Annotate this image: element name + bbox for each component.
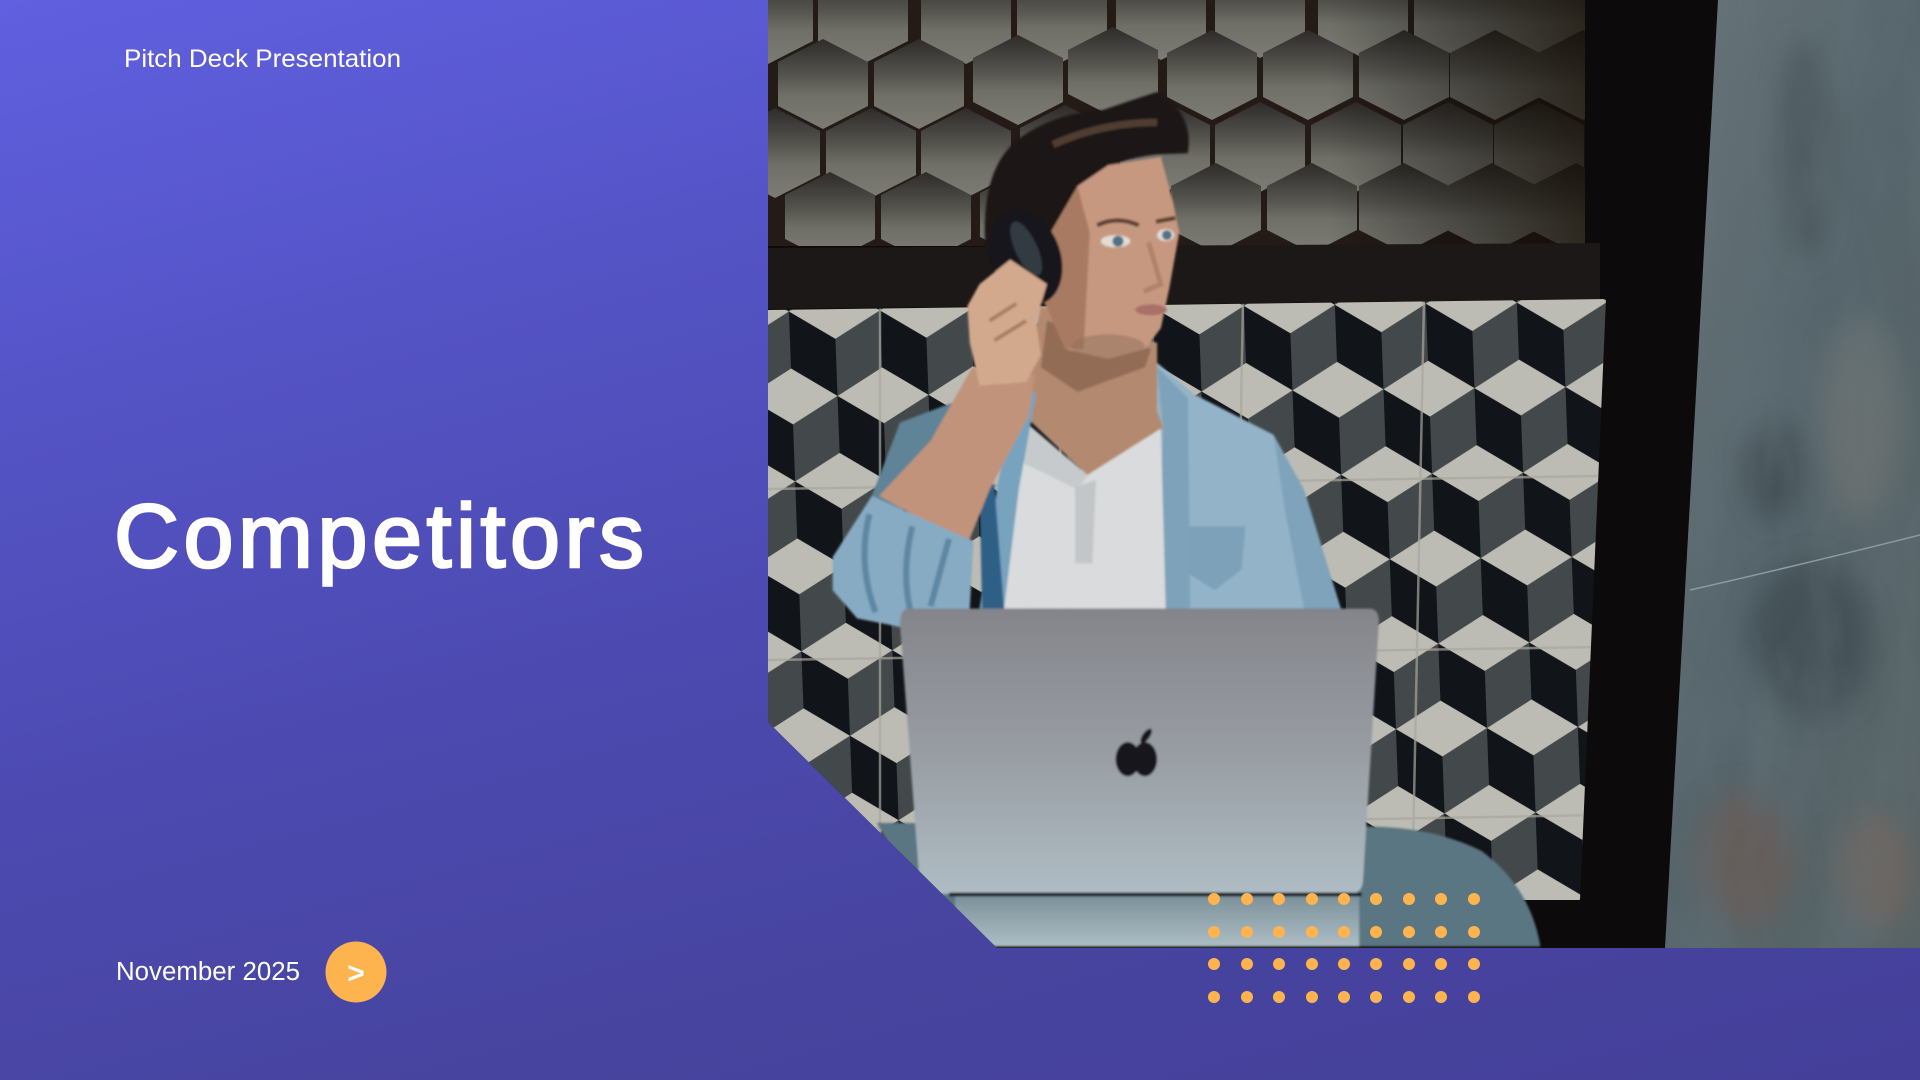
- heading: Pitch Deck Presentation: Pitch Deck Presentation: [124, 45, 401, 73]
- lips: [1135, 304, 1167, 315]
- brows: [1097, 218, 1176, 225]
- finger creases: [989, 304, 1026, 340]
- sleeve folds: [864, 514, 949, 618]
- nose: [1144, 242, 1161, 291]
- table: [877, 823, 1540, 947]
- dark wooden beam: [768, 243, 1600, 309]
- polo collar: [1024, 428, 1087, 488]
- neck shadow: [1041, 321, 1151, 392]
- headphone highlight: [1009, 220, 1043, 276]
- headphone cup: [990, 230, 1064, 304]
- man: [833, 92, 1540, 947]
- geometric cube tile wall: [768, 299, 1608, 900]
- polo placket: [1075, 480, 1096, 563]
- icon: orange arrow button: >: [347, 957, 365, 990]
- date: November 2025: November 2025: [116, 958, 300, 986]
- concrete column: [1665, 0, 1920, 948]
- blue shadow stripe: [980, 484, 1004, 609]
- face: [1067, 154, 1180, 359]
- laptop shadow: [949, 893, 1362, 896]
- hand: [967, 260, 1047, 386]
- decorative dot grid: [1208, 893, 1480, 1003]
- left denim placket: [980, 380, 1036, 609]
- icon: orange arrow button: [326, 942, 386, 1002]
- side of face shade: [1043, 186, 1090, 349]
- denim placket shade: [1157, 367, 1190, 609]
- rear shirt sleeve: [871, 402, 952, 511]
- white polo shirt: [1004, 416, 1166, 609]
- right side of denim shirt: [1156, 362, 1306, 610]
- laptop: [900, 609, 1379, 894]
- shirt pocket: [1188, 527, 1245, 590]
- hair and headband: [985, 92, 1189, 251]
- hair highlight: [1053, 122, 1157, 144]
- forearm: [879, 367, 1035, 545]
- apple logo: [1116, 727, 1157, 776]
- honeycomb wall screen: [768, 0, 1585, 246]
- left eye: [1157, 229, 1174, 241]
- photo: man with headphones at a laptop: [723, 0, 1920, 948]
- rolled sleeve: [833, 496, 973, 627]
- right eye: [1101, 235, 1130, 247]
- stubble: [1071, 334, 1145, 359]
- table reflection: [955, 896, 1359, 947]
- shirt sleeve fold: [1273, 435, 1341, 609]
- title: Competitors: Competitors: [114, 487, 644, 587]
- neck: [1019, 306, 1163, 475]
